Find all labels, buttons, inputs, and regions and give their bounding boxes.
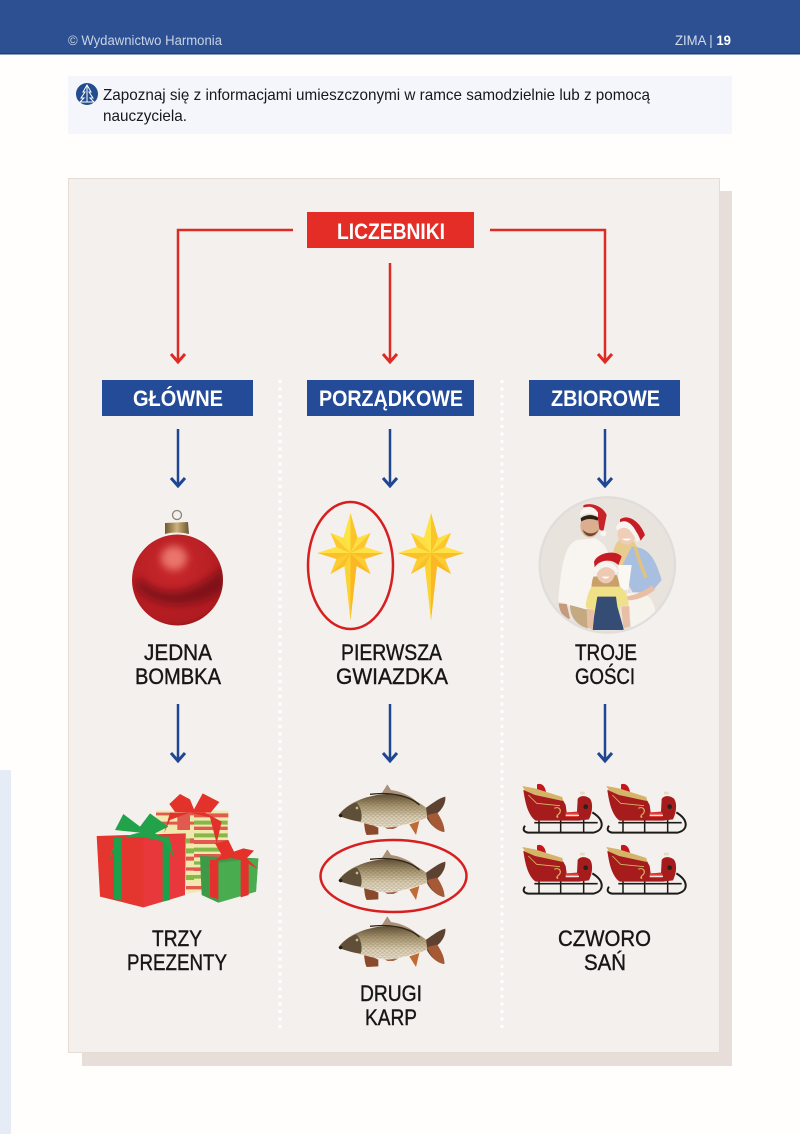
striped gift [156, 793, 228, 894]
heading: LICZEBNIKI: LICZEBNIKI [337, 219, 445, 244]
big red gift [97, 813, 186, 907]
label: TRZY PREZENTY: TRZY [152, 926, 202, 951]
arrow: blue column 1 bottom [171, 704, 185, 761]
label: CZWORO SAŃ: CZWORO [558, 926, 651, 951]
icon: carp one [338, 784, 445, 835]
arrow: blue column 2 bottom [383, 704, 397, 761]
icon: carp two circled [320, 840, 466, 912]
label: JEDNA BOMBKA: BOMBKA [135, 664, 221, 689]
label: CZWORO SAŃ [558, 926, 651, 975]
photo: family in santa hats [540, 497, 675, 633]
label: CZWORO SAŃ: SAŃ [584, 950, 626, 975]
icon: sleigh top right [606, 784, 686, 833]
small green gift [200, 840, 258, 903]
icon: sleigh bottom left [522, 845, 602, 894]
arrow: blue column 2 top [383, 429, 397, 486]
page number: ZIMA | 19 [675, 33, 731, 48]
icon: sleigh bottom right [606, 845, 686, 894]
label: TROJE GOŚCI: GOŚCI [575, 664, 635, 689]
arrow: red to GŁÓWNE [171, 230, 293, 362]
arrow: red to PORZĄDKOWE [383, 263, 397, 362]
heading: PORZĄDKOWE: PORZĄDKOWE [319, 386, 463, 411]
icon: star circled [308, 502, 393, 629]
icon: three gift boxes [97, 793, 258, 907]
instruction box [68, 76, 732, 134]
heading: PORZĄDKOWE [307, 380, 474, 416]
label: TROJE GOŚCI: TROJE [575, 640, 637, 665]
icon: christmas tree badge [76, 83, 98, 105]
arrow: red to ZBIOROWE [490, 230, 612, 362]
heading: GŁÓWNE: GŁÓWNE [133, 386, 223, 411]
heading: GŁÓWNE [102, 380, 253, 416]
panel shadow [82, 191, 732, 1066]
label: TROJE GOŚCI [575, 640, 637, 689]
left edge decorative strip [0, 770, 11, 1134]
label: DRUGI KARP [360, 981, 422, 1030]
icon: red bauble [132, 510, 225, 626]
label: JEDNA BOMBKA: JEDNA [144, 640, 212, 665]
main panel [68, 178, 720, 1052]
heading: ZBIOROWE [529, 380, 680, 416]
red ellipse highlight [308, 502, 393, 629]
man [558, 504, 609, 628]
heading: LICZEBNIKI [307, 212, 474, 248]
label: PIERWSZA GWIAZDKA: GWIAZDKA [336, 664, 448, 689]
girl [586, 553, 630, 630]
woman [613, 517, 662, 630]
icon: sleigh top left [522, 784, 602, 833]
arrow: blue column 3 bottom [598, 704, 612, 761]
heading: ZBIOROWE: ZBIOROWE [551, 386, 660, 411]
label: DRUGI KARP: DRUGI [360, 981, 422, 1006]
publisher text: © Wydawnictwo Harmonia [68, 33, 222, 48]
header bar [0, 0, 800, 54]
icon: carp three [338, 916, 445, 967]
label: JEDNA BOMBKA [135, 640, 221, 689]
instruction text: Zapoznaj się z informacjami umieszczonymi w ramce samodzielnie lub z pomocą [103, 87, 650, 104]
arrow: blue column 1 top [171, 429, 185, 486]
red ellipse highlight [320, 840, 466, 912]
label: DRUGI KARP: KARP [365, 1005, 417, 1030]
label: TRZY PREZENTY: PREZENTY [127, 950, 227, 975]
icon: second star [398, 513, 464, 620]
instruction text: nauczyciela. [103, 108, 187, 125]
label: TRZY PREZENTY [127, 926, 227, 975]
arrow: blue column 3 top [598, 429, 612, 486]
label: PIERWSZA GWIAZDKA [336, 640, 448, 689]
label: PIERWSZA GWIAZDKA: PIERWSZA [341, 640, 442, 665]
column separators [280, 380, 502, 1028]
